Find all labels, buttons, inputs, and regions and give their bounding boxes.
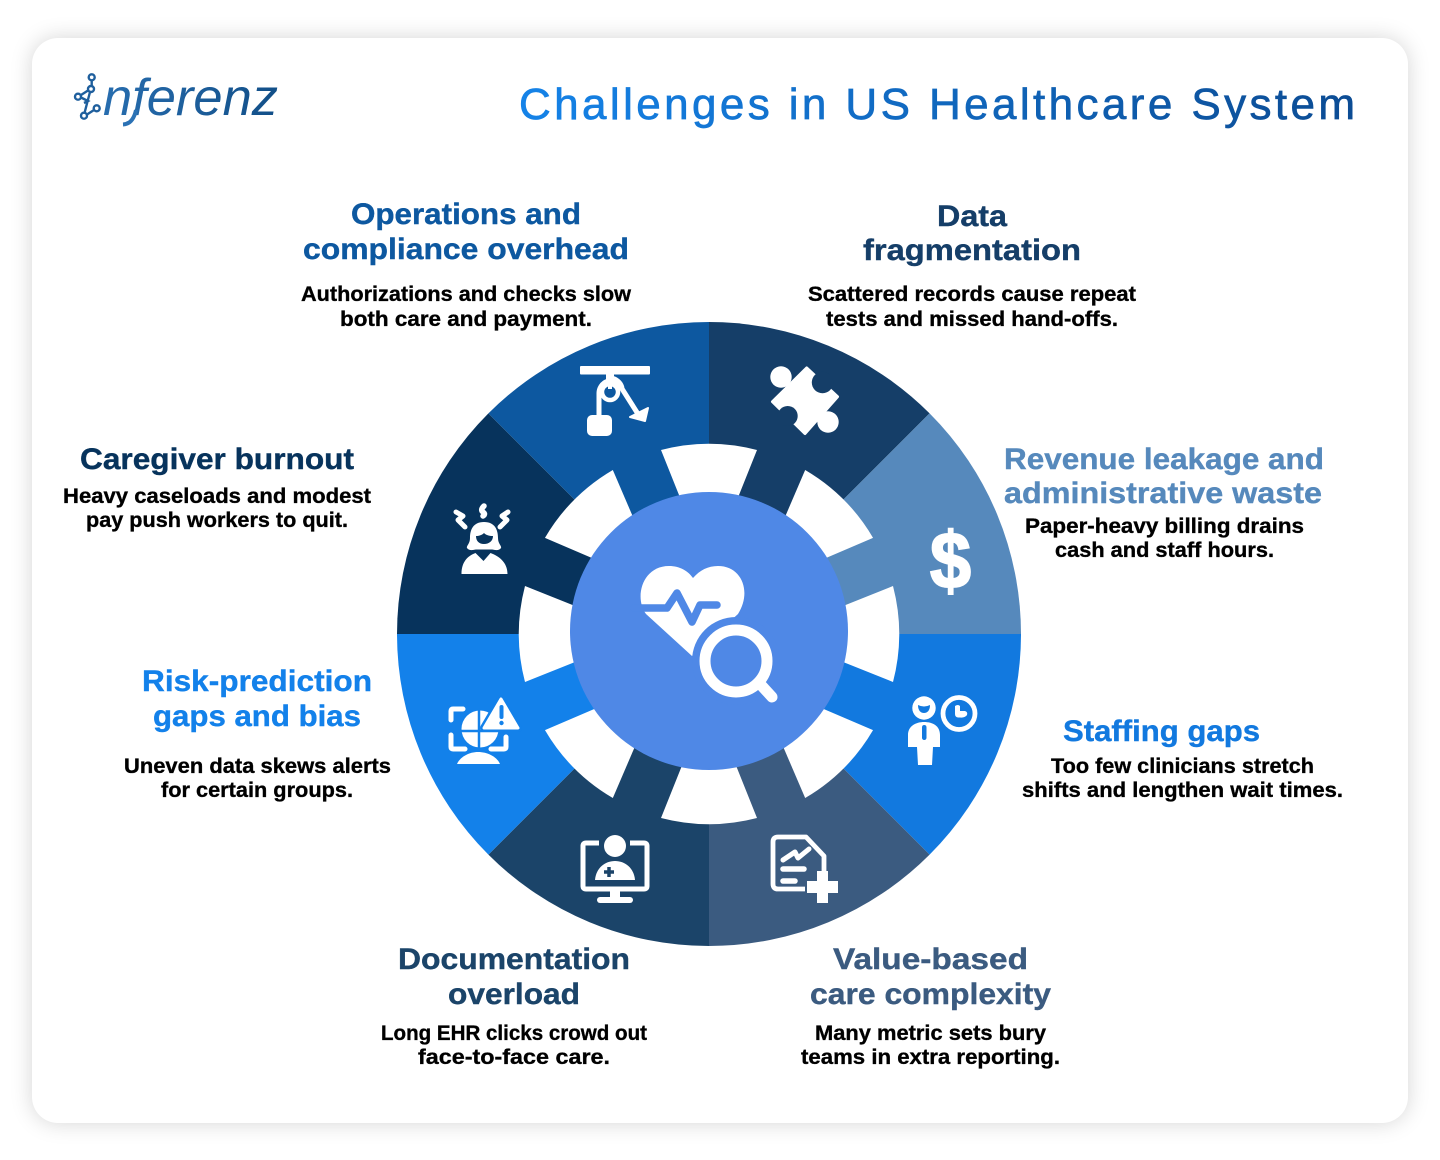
block: documentation overload: Long EHR clicks crowd out — [381, 1021, 647, 1045]
icon: dollar sign: $ — [930, 516, 971, 605]
logo: inferenz: nferenz — [103, 69, 278, 127]
segment: risk prediction — [397, 634, 709, 855]
block: staffing gaps — [1022, 715, 1343, 802]
white ring blocks — [519, 444, 899, 824]
block: data fragmentation — [808, 200, 1136, 331]
block: risk prediction: Uneven data skews alerts — [124, 754, 391, 778]
block: revenue leakage: Revenue leakage and — [1004, 443, 1324, 476]
icon: puzzle piece — [770, 366, 839, 434]
block: data fragmentation: Data — [937, 200, 1007, 233]
block: documentation overload: face-to-face care. — [418, 1045, 610, 1069]
block: caregiver burnout: Caregiver burnout — [80, 443, 354, 476]
block: documentation overload: Documentation — [398, 943, 630, 976]
block: data fragmentation: fragmentation — [863, 234, 1081, 267]
block: revenue leakage: Paper-heavy billing drains — [1025, 514, 1304, 538]
block: staffing gaps: shifts and lengthen wait times. — [1022, 778, 1343, 802]
block: operations and compliance overhead: compliance overhead — [303, 233, 629, 266]
block: revenue leakage: cash and staff hours. — [1055, 538, 1274, 562]
wheel chart — [397, 322, 1021, 946]
segment: documentation overload — [488, 634, 709, 946]
block: documentation overload — [381, 943, 647, 1069]
segment: caregiver burnout — [397, 413, 709, 634]
block: value-based care complexity: Many metric sets bury — [815, 1021, 1046, 1045]
center circle — [570, 492, 848, 770]
block: caregiver burnout — [63, 443, 371, 532]
block: data fragmentation: Scattered records cause repeat — [808, 282, 1136, 306]
block: documentation overload: overload — [448, 978, 580, 1011]
block: caregiver burnout: Heavy caseloads and modest — [63, 484, 371, 508]
block: revenue leakage — [1004, 443, 1324, 562]
icon: pulley — [580, 366, 650, 436]
segment: value-based care — [709, 634, 930, 946]
block: staffing gaps: Staffing gaps — [1063, 715, 1260, 748]
segment: data fragmentation — [709, 322, 930, 634]
segment: revenue leakage — [709, 413, 1021, 634]
segment: staffing gaps — [709, 634, 1021, 855]
block: operations and compliance overhead: Authorizations and checks slow — [301, 282, 631, 306]
block: revenue leakage: administrative waste — [1004, 477, 1322, 510]
block: caregiver burnout: pay push workers to quit. — [86, 508, 348, 532]
block: risk prediction: gaps and bias — [153, 700, 361, 733]
title: Challenges in US Healthcare System — [519, 80, 1355, 129]
block: operations and compliance overhead: Operations and — [351, 198, 581, 231]
segment: operations overhead — [488, 322, 709, 634]
block: value-based care complexity: teams in extra reporting. — [801, 1045, 1060, 1069]
block: risk prediction: for certain groups. — [161, 778, 353, 802]
block: value-based care complexity: care complexity — [810, 978, 1051, 1011]
block: value-based care complexity — [801, 943, 1060, 1069]
icon: risk globe and warning — [451, 699, 518, 764]
icon: stressed caregiver — [456, 506, 508, 574]
icon: staff and clock — [908, 696, 975, 765]
block: value-based care complexity: Value-based — [833, 943, 1028, 976]
block: operations and compliance overhead: both care and payment. — [340, 307, 592, 331]
block: risk prediction: Risk-prediction — [142, 665, 372, 698]
icon: heart and magnifier — [634, 566, 780, 705]
block: operations and compliance overhead — [301, 198, 631, 331]
icon: telehealth monitor — [583, 835, 647, 903]
block: staffing gaps: Too few clinicians stretch — [1051, 754, 1314, 778]
block: data fragmentation: tests and missed hand-offs. — [826, 307, 1118, 331]
icon: report with plus — [773, 837, 838, 903]
block: risk prediction — [124, 665, 391, 802]
